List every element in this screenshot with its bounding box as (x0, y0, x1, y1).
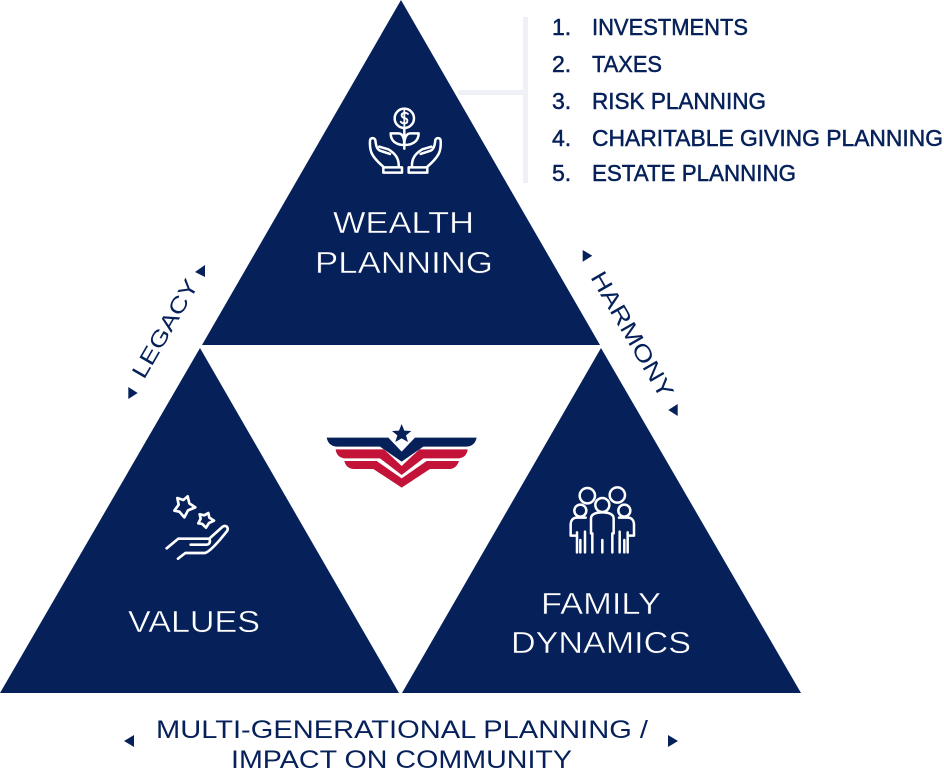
heading: family dynamics (511, 586, 691, 660)
logo: star and wings (327, 424, 477, 488)
numbered list: RISK PLANNING (592, 88, 766, 114)
panel: wealth planning triangle (202, 0, 600, 345)
panel: family dynamics triangle (402, 348, 801, 693)
label: harmony (583, 250, 679, 416)
label: multi-generational planning: MULTI-GENERATIONAL PLANNING / (156, 716, 648, 744)
heading: family dynamics: FAMILY (541, 586, 661, 621)
numbered list: INVESTMENTS (592, 14, 748, 40)
numbered list: CHARITABLE GIVING PLANNING (592, 125, 943, 151)
heading: values: VALUES (128, 604, 260, 639)
heading: family dynamics: DYNAMICS (511, 625, 691, 660)
heading: wealth planning: PLANNING (315, 245, 493, 280)
numbered list: 3. (552, 88, 571, 114)
panel: values triangle (0, 348, 399, 693)
label: legacy (127, 265, 205, 399)
icon: hands holding dollar plant (370, 109, 441, 173)
numbered list: 2. (552, 51, 571, 77)
numbered list: 4. (552, 125, 571, 151)
label: multi-generational planning: IMPACT ON COMMUNITY (231, 746, 572, 774)
icon: family group (571, 487, 634, 552)
label: harmony: HARMONY (586, 266, 679, 402)
numbered list: ESTATE PLANNING (592, 160, 796, 186)
label: legacy: LEGACY (127, 274, 204, 382)
numbered list: 1. (552, 14, 571, 40)
heading: wealth planning (315, 205, 493, 280)
heading: wealth planning: WEALTH (333, 205, 474, 240)
numbered list: 5. (552, 160, 571, 186)
icon: hand with stars (167, 496, 228, 559)
numbered list (552, 14, 943, 186)
connector from wealth planning to list (458, 17, 528, 183)
numbered list: TAXES (592, 51, 662, 77)
label: multi-generational planning (124, 716, 678, 774)
